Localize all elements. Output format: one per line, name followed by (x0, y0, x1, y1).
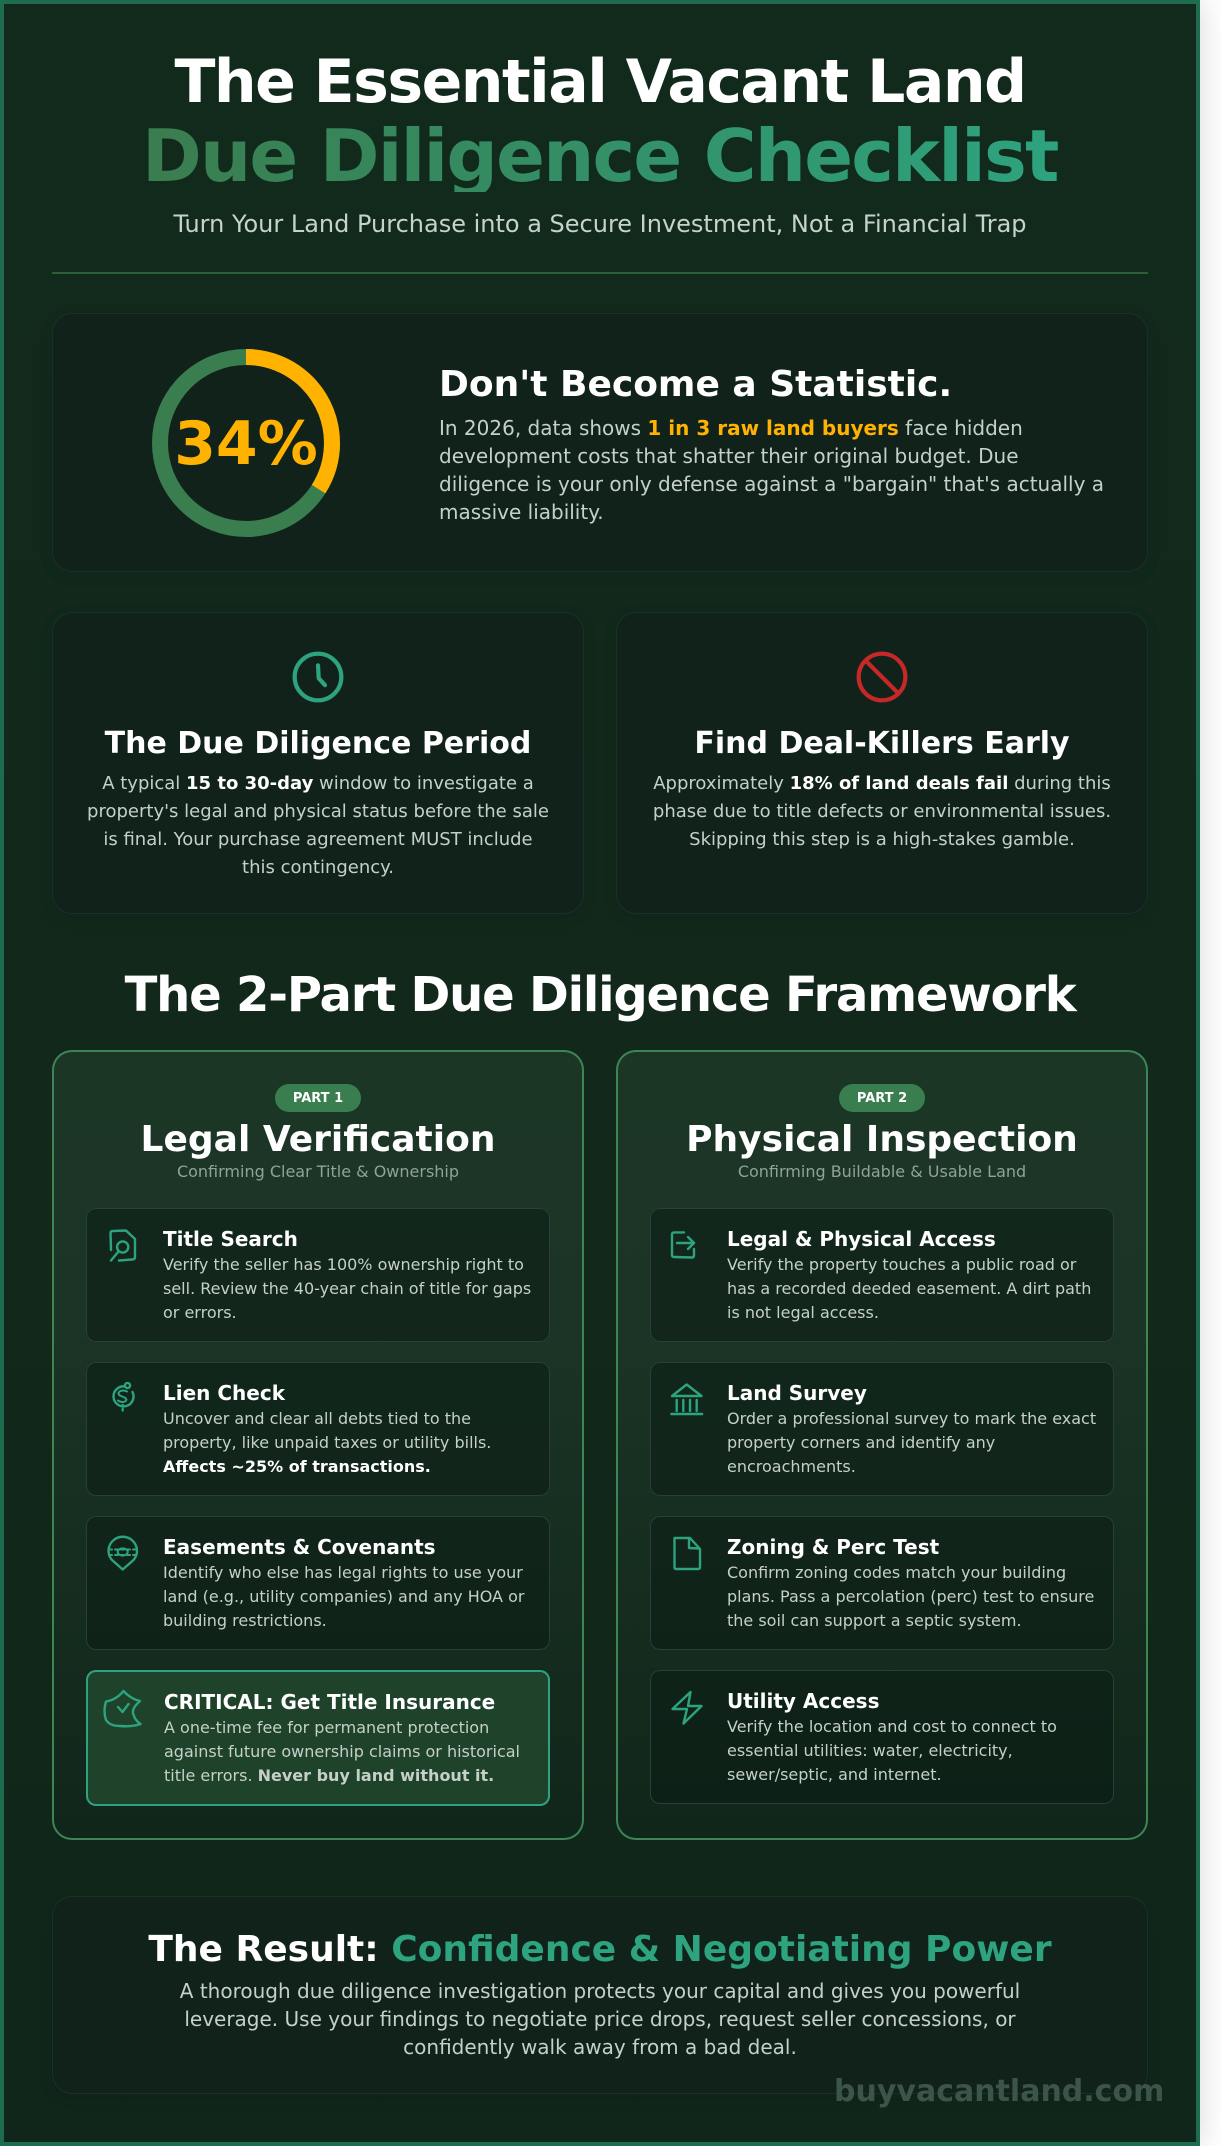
item text: plans. Pass a percolation (perc) test to ensure (727, 1586, 1094, 1606)
text: Approximately 18% of land deals fail during this (653, 773, 1111, 794)
item text (163, 1408, 491, 1476)
statistic text: massive liability. (439, 500, 604, 524)
text: A typical 15 to 30-day window to investigate a (102, 773, 534, 794)
item title: Zoning & Perc Test (727, 1535, 939, 1559)
text: Skipping this step is a high-stakes gamble. (689, 829, 1075, 850)
panel title: Legal Verification (141, 1119, 495, 1160)
panel subtitle: Confirming Buildable & Usable Land (738, 1162, 1026, 1181)
item title: CRITICAL: Get Title Insurance (164, 1690, 495, 1714)
item: access (650, 1208, 1114, 1342)
icon: lightning bolt (671, 1690, 703, 1725)
title line 1: The Essential Vacant Land (174, 47, 1026, 117)
item title: Easements & Covenants (163, 1535, 436, 1559)
panel: the result (52, 1896, 1148, 2094)
badge (839, 1084, 925, 1112)
heading: Find Deal-Killers Early (694, 726, 1070, 760)
item text (727, 1408, 1096, 1476)
item text (727, 1254, 1091, 1322)
item: zoning (650, 1516, 1114, 1650)
item text: Verify the seller has 100% ownership right to (163, 1254, 524, 1274)
item text: A one-time fee for permanent protection (164, 1718, 489, 1736)
statistic heading: Don't Become a Statistic. (439, 364, 952, 404)
text (87, 773, 549, 878)
item text: Uncover and clear all debts tied to the (163, 1408, 471, 1428)
icon: bank (670, 1383, 704, 1416)
statistic text: In 2026, data shows 1 in 3 raw land buyers face hidden (439, 416, 1023, 440)
item text: property, like unpaid taxes or utility bills. (163, 1432, 491, 1452)
item: land survey (650, 1362, 1114, 1496)
item title: Legal & Physical Access (727, 1227, 996, 1251)
text: phase due to title defects or environmental issues. (653, 801, 1111, 822)
item text: Identify who else has legal rights to use your (163, 1562, 523, 1582)
badge (275, 1084, 361, 1112)
panel subtitle: Confirming Clear Title & Ownership (177, 1162, 459, 1181)
badge: PART 2 (857, 1091, 907, 1106)
item: utility access (650, 1670, 1114, 1804)
item title: Land Survey (727, 1381, 867, 1405)
item text: or errors. (163, 1302, 237, 1322)
icon: document search (109, 1229, 136, 1262)
icon: file (673, 1536, 702, 1570)
item text: Affects ~25% of transactions. (163, 1456, 431, 1476)
item text: has a recorded deeded easement. A dirt path (727, 1278, 1091, 1298)
item text: Verify the location and cost to connect to (727, 1716, 1057, 1736)
item title: Utility Access (727, 1689, 880, 1713)
item: lien check (86, 1362, 550, 1496)
item: easements (86, 1516, 550, 1650)
text (653, 773, 1111, 850)
item text: against future ownership claims or historical (164, 1742, 520, 1760)
panel: part 2 physical inspection (616, 1050, 1148, 1840)
result text: A thorough due diligence investigation protects your capital and gives you powerful (180, 1979, 1020, 2003)
heading: The Due Diligence Period (105, 726, 531, 760)
icon: exit arrow (670, 1231, 696, 1259)
icon: ban (856, 652, 908, 702)
donut chart: 34% (152, 349, 340, 537)
watermark: buyvacantland.com (834, 2074, 1164, 2109)
text: this contingency. (242, 857, 394, 878)
statistic text (439, 416, 1104, 524)
item text: building restrictions. (163, 1610, 327, 1630)
text: is final. Your purchase agreement MUST include (103, 829, 533, 850)
item text: sell. Review the 40-year chain of title for gaps (163, 1278, 531, 1298)
panel title: Physical Inspection (686, 1119, 1078, 1160)
item text: encroachments. (727, 1456, 856, 1476)
panel: part 1 legal verification (52, 1050, 584, 1840)
panel: statistic (52, 313, 1148, 572)
icon: lien coin (112, 1382, 135, 1412)
icon: shield check (103, 1690, 142, 1728)
item text: land (e.g., utility companies) and any HOA or (163, 1586, 524, 1606)
result heading: The Result: Confidence & Negotiating Power (148, 1929, 1052, 1970)
result text (180, 1979, 1020, 2059)
item text: title errors. Never buy land without it. (164, 1766, 494, 1784)
item text (727, 1562, 1094, 1630)
item text: essential utilities: water, electricity, (727, 1740, 1013, 1760)
item: title search (86, 1208, 550, 1342)
text: property's legal and physical status before the sale (87, 801, 549, 822)
item text (727, 1716, 1057, 1784)
item: title insurance (86, 1670, 550, 1806)
item text: the soil can support a septic system. (727, 1610, 1022, 1630)
icon: easement pin (107, 1536, 138, 1571)
donut chart: 34%: 34% (174, 409, 318, 479)
item text: sewer/septic, and internet. (727, 1764, 942, 1784)
item text: Verify the property touches a public road or (727, 1254, 1076, 1274)
section heading: The 2-Part Due Diligence Framework (125, 967, 1075, 1023)
item text: property corners and identify any (727, 1432, 995, 1452)
item text (163, 1254, 531, 1322)
item text (163, 1562, 524, 1630)
icon: clock (292, 652, 344, 702)
badge: PART 1 (293, 1091, 343, 1106)
subtitle: Turn Your Land Purchase into a Secure Investment, Not a Financial Trap (173, 210, 1027, 238)
item text: is not legal access. (727, 1302, 879, 1322)
item text: Order a professional survey to mark the exact (727, 1408, 1096, 1428)
result text: confidently walk away from a bad deal. (403, 2035, 797, 2059)
result text: leverage. Use your findings to negotiate price drops, request seller concessions, or (184, 2007, 1016, 2031)
panel: deal killers (616, 612, 1148, 914)
statistic text: development costs that shatter their original budget. Due (439, 444, 1019, 468)
statistic text: diligence is your only defense against a "bargain" that's actually a (439, 472, 1104, 496)
panel: due diligence period (52, 612, 584, 914)
item title: Title Search (163, 1227, 298, 1251)
item text (164, 1718, 520, 1784)
item text: Confirm zoning codes match your building (727, 1562, 1066, 1582)
item title: Lien Check (163, 1381, 285, 1405)
